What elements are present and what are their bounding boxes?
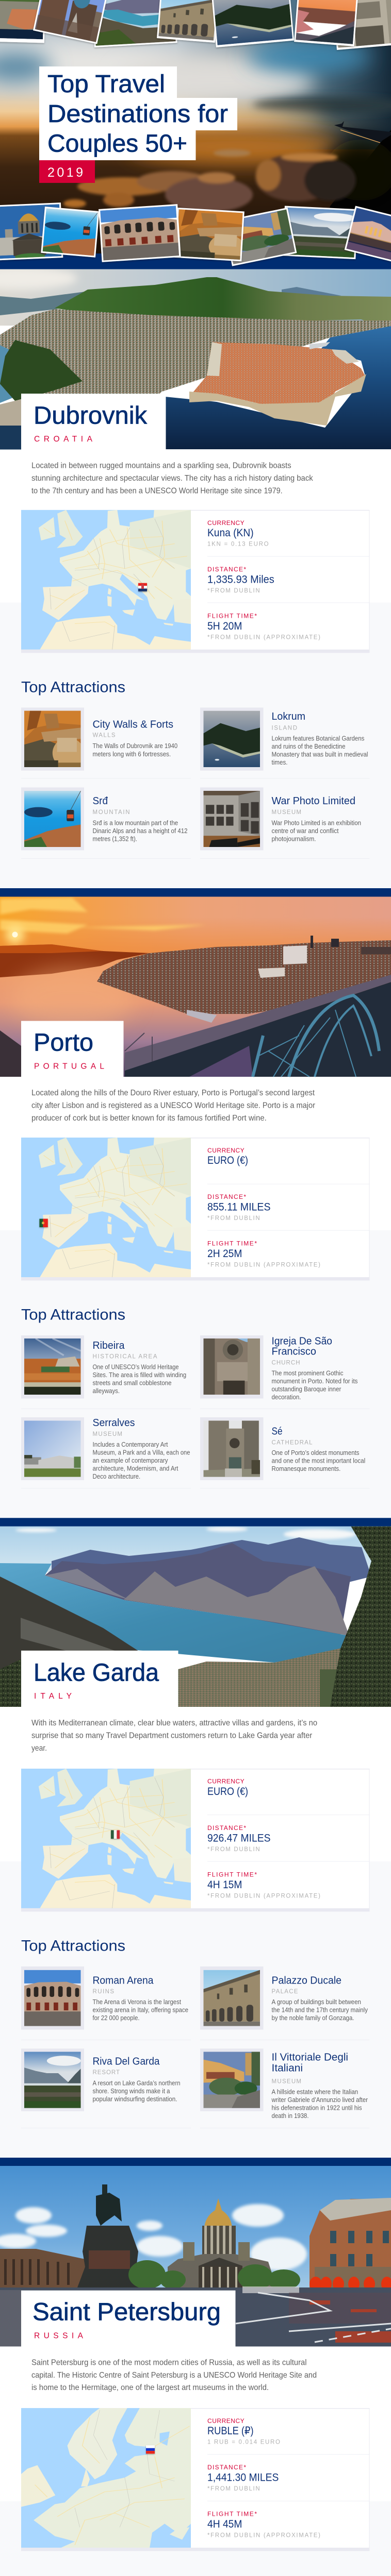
stat: distance (207, 2464, 279, 2492)
stat: flight time: FLIGHT TIME* (207, 2510, 257, 2517)
stat: flight time (207, 1871, 320, 1899)
flag marker: Portugal (39, 1219, 48, 1227)
attraction: Lokrum (200, 707, 368, 771)
hero photo: sunset above clouds from plane window (0, 0, 391, 253)
title text: Couples 50+ (47, 130, 187, 158)
stat: flight time: 4H 45M (207, 2518, 242, 2530)
attraction: Srd (21, 787, 188, 850)
stat: currency: CURRENCY (207, 2417, 245, 2425)
heading: top attractions: Top Attractions (21, 1938, 125, 1955)
attraction: Riva Del Garda: shore. Strong winds make it a (93, 2087, 170, 2095)
intro paragraph: is home to the Hermitage, one of the largest art museums in the world. (31, 2383, 269, 2392)
info card (21, 2408, 369, 2551)
heading: top attractions: Top Attractions (21, 679, 125, 696)
attraction: Igreja De Sao Francisco (200, 1335, 358, 1401)
stat: distance: *FROM DUBLIN (207, 588, 260, 594)
country name: PORTUGAL (34, 1062, 104, 1071)
attraction: Serralves: MUSEUM (93, 1431, 122, 1437)
attraction: Igreja De Sao Francisco: outstanding Baroque inner (271, 1385, 341, 1393)
attraction: War Photo Limited: centre of war and conflict (271, 827, 339, 835)
attraction: Srd: Dinaric Alps and has a height of 412 (93, 827, 188, 835)
photo: palazzo (157, 0, 219, 43)
map of northern Europe (21, 2408, 191, 2548)
attraction: City Walls and Forts: The Walls of Dubrovnik are 1940 (93, 742, 177, 750)
flag marker: Croatia (138, 583, 147, 591)
intro paragraph (31, 1089, 316, 1123)
title text (47, 71, 228, 158)
photo: Riva del Garda (282, 206, 358, 259)
stat: distance: 1,441.30 MILES (207, 2472, 279, 2483)
section divider band (0, 1518, 391, 1527)
stat: currency: EURO (€) (207, 1155, 248, 1166)
top photo strip (0, 0, 391, 50)
map of Europe (21, 510, 191, 650)
photo: cable car (41, 207, 100, 258)
attraction: City Walls and Forts (21, 707, 177, 771)
year badge: 2019 (47, 165, 83, 180)
intro paragraph: Located along the hills of the Douro River estuary, Porto is Portugal’s second largest (31, 1089, 315, 1097)
attraction: Lokrum: and ruins of the Benedictine (271, 742, 346, 750)
info card (21, 1138, 369, 1281)
info card (21, 510, 369, 653)
attraction: Palazzo Ducale (200, 1967, 368, 2030)
attraction: Palazzo Ducale: PALACE (271, 1989, 298, 1995)
photo: Dubrovnik aerial (0, 0, 45, 43)
attraction: Il Vittoriale Degli Italiani: MUSEUM (271, 2078, 301, 2084)
photo: Dubrovnik walls (174, 208, 247, 262)
attraction: Il Vittoriale Degli Italiani: Il Vittoriale Degli (271, 2052, 348, 2063)
section: Saint Petersburg (0, 2166, 391, 2576)
attraction: Palazzo Ducale: by the noble family of Gonzaga. (271, 2014, 354, 2022)
photo: St Isaac's (0, 202, 65, 261)
attraction: Srd: Srđ is a low mountain part of the (93, 819, 178, 826)
stat: distance: 855.11 MILES (207, 1201, 270, 1213)
attraction: Se: Sé (271, 1426, 283, 1437)
attraction: Serralves: Museum, a Park and a Villa, each one (93, 1448, 190, 1456)
attraction: Lokrum: times. (271, 758, 288, 766)
stat: currency: 1 RUB = 0.014 EURO (207, 2439, 280, 2445)
stat: distance: DISTANCE* (207, 2464, 246, 2471)
photo: carved portal (332, 0, 391, 50)
attraction: Palazzo Ducale: the 14th and the 17th century mainly (271, 2006, 368, 2014)
map of Europe (21, 1138, 191, 1277)
intro paragraph (31, 2359, 317, 2392)
stat: distance (207, 1824, 270, 1853)
attraction: Ribeira: streets and small cobblestone (93, 1379, 171, 1387)
attraction: Igreja De Sao Francisco: monument in Porto. Noted for its (271, 1377, 358, 1385)
attraction: Serralves: Deco architecture. (93, 1472, 140, 1480)
year badge (39, 160, 95, 183)
intro paragraph: capital. The Historic Centre of Saint Petersburg is a UNESCO World Heritage Site and (31, 2371, 317, 2380)
intro paragraph (31, 462, 314, 495)
attraction: Serralves: Serralves (93, 1417, 135, 1429)
attraction: Palazzo Ducale: A group of buildings built between (271, 1998, 361, 2006)
stat: currency: CURRENCY (207, 1778, 245, 1785)
attraction: Riva Del Garda: RESORT (93, 2070, 120, 2076)
country name: ITALY (34, 1692, 72, 1701)
intro paragraph: city after Lisbon and is registered as a UNESCO World Heritage site. Porto is a major (31, 1101, 316, 1110)
section: Porto (0, 896, 391, 1489)
country name: RUSSIA (34, 2332, 84, 2341)
intro paragraph: Saint Petersburg is one of the most modern cities of Russia, as well as its cultural (31, 2359, 307, 2367)
stat: distance (207, 566, 274, 594)
stat: currency: EURO (€) (207, 1786, 248, 1798)
city name: Saint Petersburg (32, 2299, 221, 2326)
map of Europe (21, 1769, 191, 1908)
attraction: Se: Romanesque monuments. (271, 1465, 340, 1472)
attraction: Ribeira: alleyways. (93, 1387, 120, 1395)
section: Lake Garda (0, 1526, 391, 2128)
banner photo: Porto at sunset (0, 896, 391, 1077)
stat: currency: 1KN = 0.13 EURO (207, 541, 269, 547)
flag marker: Italy (111, 1830, 120, 1839)
stat: currency (207, 1778, 248, 1798)
wing (334, 121, 391, 143)
title box (39, 66, 237, 160)
stat: flight time (207, 1240, 320, 1268)
banner photo: Lake Garda (0, 1526, 391, 1707)
intro paragraph: surprise that so many Travel Department customers return to Lake Garda year after (31, 1731, 313, 1740)
country name: CROATIA (34, 435, 93, 444)
navy band (0, 253, 391, 269)
attraction: Igreja De Sao Francisco: decoration. (271, 1393, 301, 1401)
attraction: Roman Arena (21, 1967, 188, 2030)
city label box (21, 2291, 235, 2346)
attraction: Palazzo Ducale: Palazzo Ducale (271, 1975, 341, 1987)
stat: flight time: *FROM DUBLIN (APPROXIMATE) (207, 635, 320, 641)
bottom photo strip (0, 202, 391, 266)
section divider band (0, 888, 391, 896)
attraction: Riva Del Garda: Riva Del Garda (93, 2056, 160, 2067)
attraction: Lokrum: ISLAND (271, 725, 297, 732)
info card (21, 1769, 369, 1911)
intro paragraph: producer of cork but is better known for its famous fortified Port wine. (31, 1114, 267, 1123)
attraction: Se: CATHEDRAL (271, 1439, 313, 1446)
attraction: City Walls and Forts: WALLS (93, 733, 116, 739)
attraction: Serralves: Includes a Contemporary Art (93, 1440, 168, 1448)
attraction: War Photo Limited (200, 787, 361, 850)
banner photo: Dubrovnik aerial (0, 269, 391, 449)
attraction: War Photo Limited: War Photo Limited (271, 795, 355, 807)
attraction: City Walls and Forts: meters long with 6 fortresses. (93, 750, 171, 758)
attraction: Se (200, 1417, 365, 1480)
attraction: Igreja De Sao Francisco: Igreja De São (271, 1335, 332, 1347)
attraction: War Photo Limited: War Photo Limited is an exhibition (271, 819, 361, 826)
attraction: Lokrum: Lokrum (271, 711, 305, 722)
attraction: Serralves: architecture, Modernism, and Art (93, 1464, 178, 1472)
photo: Roman Arena (99, 204, 181, 262)
stat: flight time: *FROM DUBLIN (APPROXIMATE) (207, 1262, 320, 1268)
stat: distance: DISTANCE* (207, 1824, 246, 1832)
stat: flight time: *FROM DUBLIN (APPROXIMATE) (207, 1893, 320, 1899)
attraction: Se: One of Porto’s oldest monuments (271, 1449, 360, 1456)
attraction: Riva Del Garda: popular windsurfing destination. (93, 2095, 177, 2103)
clouds (63, 149, 356, 212)
attraction: Igreja De Sao Francisco: The most prominent Gothic (271, 1369, 344, 1377)
attraction: Riva Del Garda (21, 2048, 181, 2111)
stat: flight time (207, 2510, 320, 2539)
stat: distance: 1,335.93 Miles (207, 574, 274, 585)
photo: Il Vittoriale (223, 208, 297, 266)
stat: distance: DISTANCE* (207, 566, 246, 573)
attraction: Ribeira: Ribeira (93, 1340, 125, 1351)
attraction: Srd: Srđ (93, 795, 108, 807)
photo: church of the spilled blood (33, 0, 108, 44)
attraction: Riva Del Garda: A resort on Lake Garda’s northern (93, 2079, 181, 2087)
attraction: War Photo Limited: MUSEUM (271, 809, 301, 816)
attraction: Roman Arena: The Arena di Verona is the largest (93, 1998, 181, 2006)
section divider band (0, 2158, 391, 2166)
stat: distance: DISTANCE* (207, 1193, 246, 1200)
heading: top attractions: Top Attractions (21, 1307, 125, 1323)
hero section (0, 0, 391, 269)
attraction: Lokrum: Monastery that was built in medieval (271, 750, 368, 758)
attraction: Ribeira (21, 1335, 186, 1398)
photo: Porto sunset (294, 0, 358, 46)
title text: Top Travel (47, 71, 165, 98)
stat: flight time: 2H 25M (207, 1248, 242, 1260)
intro paragraph (31, 1719, 317, 1753)
city name: Lake Garda (34, 1659, 159, 1686)
stat: currency: RUBLE (₽) (207, 2425, 254, 2437)
intro paragraph: stunning architecture and spectacular views. The city has a rich history dating back (31, 474, 314, 483)
stat: flight time: FLIGHT TIME* (207, 1240, 257, 1247)
stat: flight time: *FROM DUBLIN (APPROXIMATE) (207, 2533, 320, 2539)
stat: currency: Kuna (KN) (207, 527, 254, 539)
stat: distance: 926.47 MILES (207, 1832, 270, 1844)
stat: flight time: FLIGHT TIME* (207, 612, 257, 619)
attraction: Il Vittoriale Degli Italiani: writer Gabriele d’Annunzio lived after (271, 2096, 368, 2104)
intro paragraph: to the 7th century and has been a UNESCO World Heritage site since 1979. (31, 486, 283, 495)
intro paragraph: year. (31, 1744, 47, 1753)
stat: distance: *FROM DUBLIN (207, 1215, 260, 1222)
stat: currency (207, 2417, 280, 2445)
stat: flight time: 5H 20M (207, 620, 242, 632)
attraction: Lokrum: Lokrum features Botanical Gardens (271, 735, 365, 742)
attraction: Ribeira: HISTORICAL AREA (93, 1354, 157, 1360)
city label box (21, 1021, 124, 1077)
attraction: Roman Arena: RUINS (93, 1989, 114, 1995)
section backgrounds (0, 603, 391, 2576)
city name: Dubrovnik (34, 402, 148, 429)
intro paragraph: With its Mediterranean climate, clear blue waters, attractive villas and gardens, it’s no (31, 1719, 317, 1727)
attraction: Roman Arena: for 22 000 people. (93, 2014, 139, 2022)
banner photo: St Isaac's Square (0, 2166, 391, 2346)
attraction: Il Vittoriale Degli Italiani: Italiani (271, 2062, 303, 2074)
photo: lake (91, 0, 177, 47)
attraction: Igreja De Sao Francisco: Francisco (271, 1346, 316, 1357)
attraction: Ribeira: Sites. The area is filled with winding (93, 1371, 186, 1379)
attraction: Srd: MOUNTAIN (93, 809, 130, 816)
stat: distance: *FROM DUBLIN (207, 2486, 260, 2492)
attraction: Roman Arena: Roman Arena (93, 1975, 154, 1987)
stat: flight time: 4H 15M (207, 1879, 242, 1891)
attraction: Ribeira: One of UNESCO’s World Heritage (93, 1363, 178, 1370)
city name: Porto (34, 1029, 93, 1057)
city label box (21, 1651, 178, 1707)
stat: currency: CURRENCY (207, 1147, 245, 1154)
city label box (21, 394, 166, 449)
stat: currency (207, 519, 269, 547)
title text: Destinations for (47, 100, 228, 128)
stat: flight time (207, 612, 320, 641)
stat: currency (207, 1147, 248, 1166)
attraction: Il Vittoriale Degli Italiani: death in 1938. (271, 2112, 308, 2120)
attraction: Igreja De Sao Francisco: CHURCH (271, 1360, 300, 1366)
attraction: Srd: metres (1,352 ft). (93, 835, 137, 843)
photo: Lokrum island (211, 0, 294, 47)
attraction: Serralves (21, 1417, 190, 1480)
stat: distance: *FROM DUBLIN (207, 1846, 260, 1853)
attraction: Se: and one of the most important local (271, 1457, 365, 1464)
attraction: City Walls and Forts: City Walls & Forts (93, 719, 173, 730)
stat: distance (207, 1193, 270, 1222)
flag marker: Russia (146, 2445, 155, 2454)
attraction: Roman Arena: existing arena in Italy, offering space (93, 2006, 188, 2014)
attraction: Serralves: an example of contemporary (93, 1456, 168, 1464)
attraction: Il Vittoriale Degli Italiani: A hillside estate where the Italian (271, 2088, 358, 2096)
section: Dubrovnik (0, 267, 391, 859)
attraction: Il Vittoriale Degli Italiani: his defenestration in 1922 until his (271, 2104, 362, 2111)
attraction: War Photo Limited: photojournalism. (271, 835, 316, 843)
stat: flight time: FLIGHT TIME* (207, 1871, 257, 1878)
attraction: Il Vittoriale Degli Italiani (200, 2048, 368, 2120)
stat: currency: CURRENCY (207, 519, 245, 527)
photo: Russian museum (345, 206, 391, 262)
intro paragraph: Located in between rugged mountains and a sparkling sea, Dubrovnik boasts (31, 462, 291, 470)
